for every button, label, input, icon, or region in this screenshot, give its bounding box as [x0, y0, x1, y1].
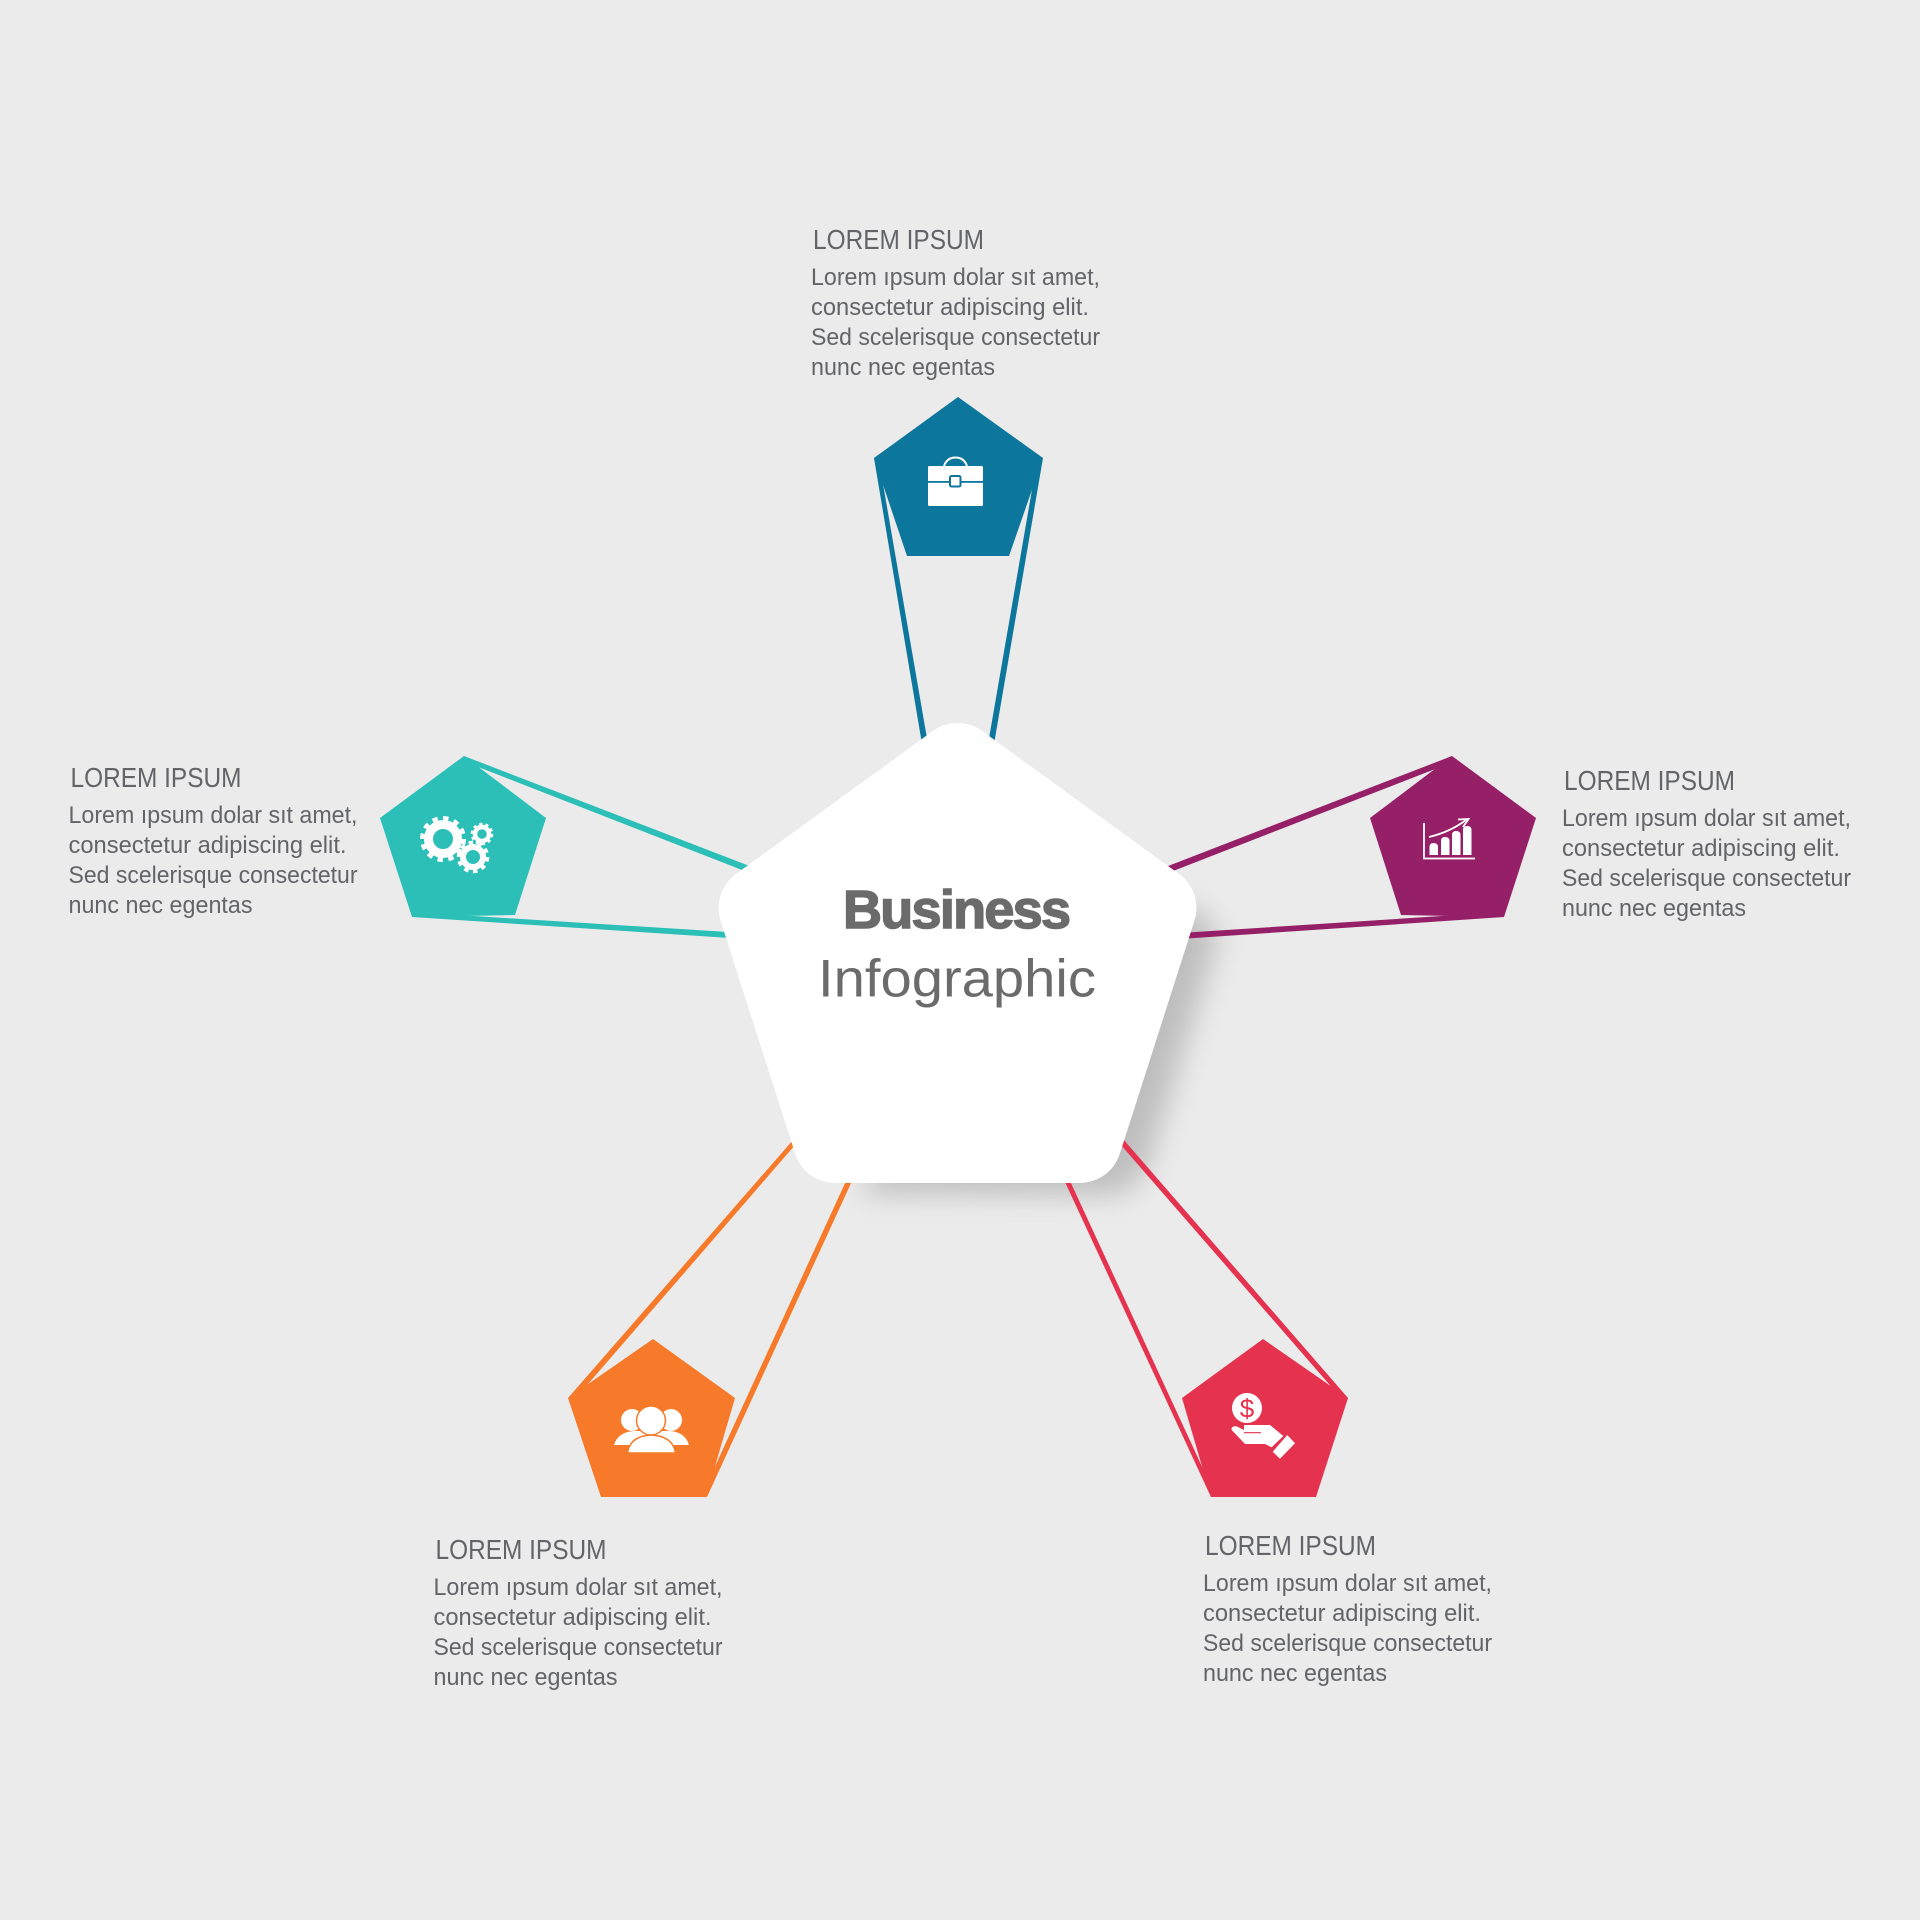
body text: top: Sed scelerisque consectetur: [811, 324, 1100, 351]
panel: top step (briefcase): [811, 224, 1100, 750]
text block: top: [811, 224, 1100, 381]
body text: bottom-left: consectetur adipiscing elit.: [434, 1604, 712, 1631]
body text: left: consectetur adipiscing elit.: [68, 832, 346, 859]
text block: bottom-right: [1203, 1530, 1492, 1687]
icon: hand with coin: $: [1240, 1394, 1255, 1424]
connector: bottom-right: [1058, 1132, 1348, 1497]
body text: right: Lorem ıpsum dolar sıt amet,: [1562, 805, 1851, 832]
icon: hand with coin: [1232, 1393, 1295, 1459]
icon: people: [614, 1406, 689, 1453]
body text: top: consectetur adipiscing elit.: [811, 294, 1089, 321]
text block: bottom-left: [434, 1534, 722, 1691]
body text: left: [68, 802, 358, 919]
body text: bottom-right: Lorem ıpsum dolar sıt amet,: [1203, 1570, 1492, 1597]
heading: top: LOREM IPSUM: [813, 224, 984, 255]
pentagon: bottom-right: [1182, 1339, 1348, 1497]
pentagon: top: [874, 397, 1043, 556]
heading: left: LOREM IPSUM: [70, 762, 242, 793]
heading: bottom-left: LOREM IPSUM: [436, 1534, 606, 1565]
body text: bottom-right: nunc nec egentas: [1203, 1660, 1387, 1687]
body text: right: Sed scelerisque consectetur: [1562, 865, 1851, 892]
connector: right: [1150, 756, 1504, 939]
connector: left: [412, 756, 760, 940]
panel: right step (chart): [1150, 756, 1851, 939]
pentagon: bottom-left: [568, 1339, 735, 1497]
body text: bottom-right: [1203, 1570, 1492, 1687]
body text: bottom-left: nunc nec egentas: [434, 1664, 618, 1691]
body text: right: [1562, 805, 1851, 922]
body text: top: Lorem ıpsum dolar sıt amet,: [811, 264, 1100, 291]
body text: right: consectetur adipiscing elit.: [1562, 835, 1840, 862]
panel: bottom-left step (people): [434, 1132, 858, 1691]
pentagon: right: [1370, 756, 1536, 917]
icon: briefcase: [928, 458, 983, 506]
body text: bottom-left: Lorem ıpsum dolar sıt amet,: [434, 1574, 722, 1601]
body text: bottom-right: consectetur adipiscing elit.: [1203, 1600, 1481, 1627]
heading: bottom-right: LOREM IPSUM: [1205, 1530, 1376, 1561]
connector: top: [874, 430, 1043, 750]
body text: right: nunc nec egentas: [1562, 895, 1746, 922]
body text: left: Lorem ıpsum dolar sıt amet,: [68, 802, 358, 829]
body text: top: nunc nec egentas: [811, 354, 995, 381]
pentagon: left: [380, 756, 546, 917]
title: Business: Business: [843, 880, 1071, 940]
body text: top: [811, 264, 1100, 381]
icon: gears: [423, 819, 492, 871]
title: Infographic: Infographic: [818, 950, 1096, 1008]
body text: bottom-left: [434, 1574, 722, 1691]
center title: [818, 880, 1096, 1008]
center pentagon: [761, 765, 1154, 1141]
panel: left step (gears): [68, 756, 760, 940]
heading: right: LOREM IPSUM: [1564, 765, 1735, 796]
panel: bottom-right step (money in hand): [1058, 1132, 1492, 1687]
body text: left: Sed scelerisque consectetur: [68, 862, 358, 889]
body text: bottom-right: Sed scelerisque consectetur: [1203, 1630, 1492, 1657]
body text: bottom-left: Sed scelerisque consectetur: [434, 1634, 722, 1661]
text block: right: [1562, 765, 1851, 922]
icon: growth chart: [1424, 819, 1475, 858]
connector: bottom-left: [568, 1132, 858, 1497]
body text: left: nunc nec egentas: [68, 892, 252, 919]
text block: left: [68, 762, 358, 919]
center pentagon shadow: [860, 905, 1219, 1195]
